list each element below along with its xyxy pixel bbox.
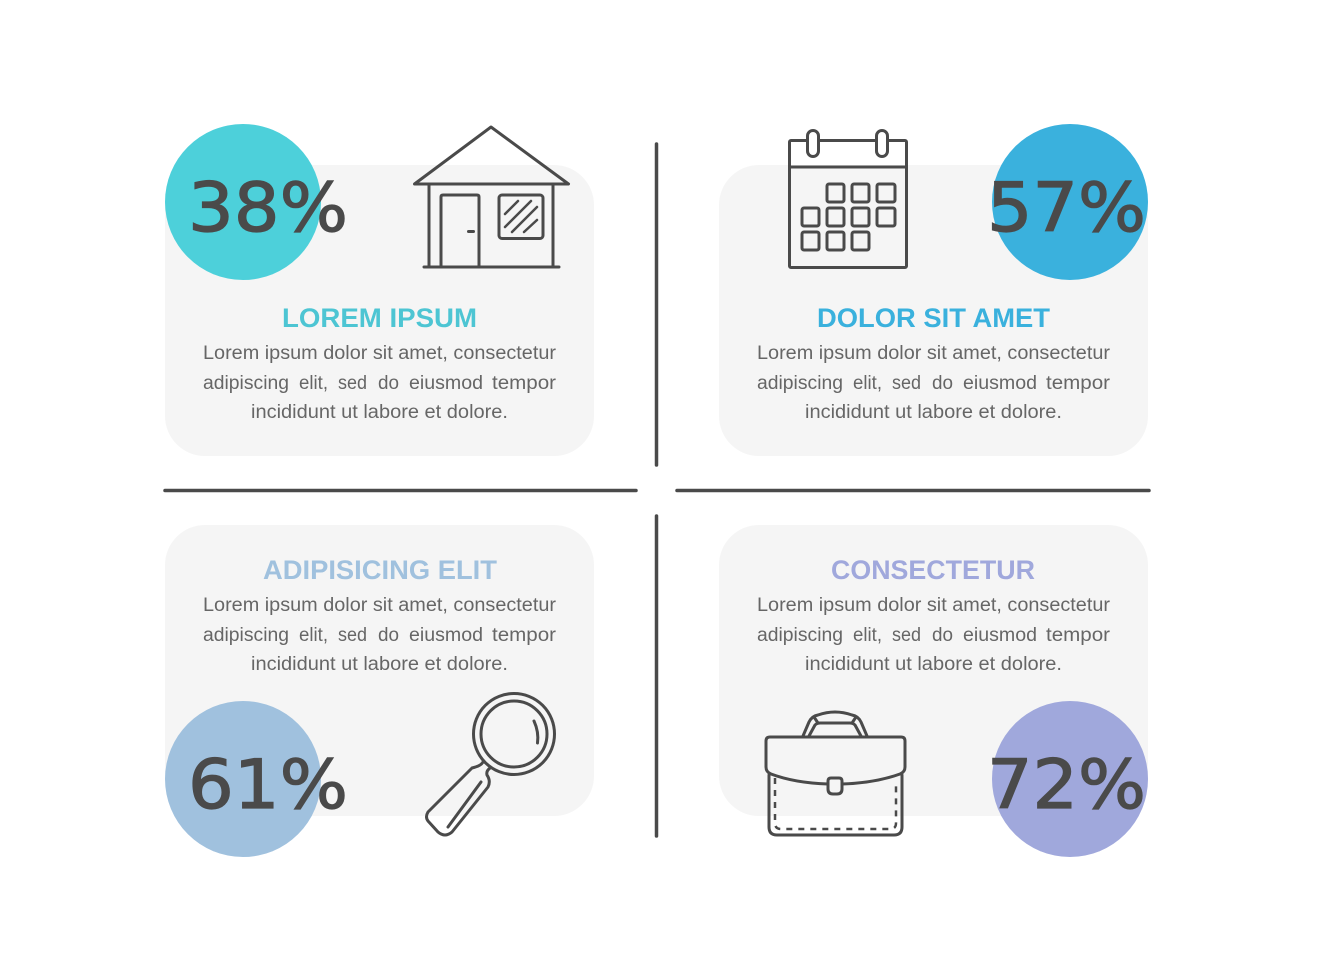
percentage circle: 57%: 57% — [987, 169, 1146, 248]
text block: lorem ipsum: tempor — [492, 373, 557, 394]
text block: consectetur: do — [932, 625, 953, 646]
icon: briefcase — [766, 712, 905, 835]
text block: lorem ipsum: eiusmod — [409, 373, 483, 394]
text block: adipisicing elit: adipiscing — [203, 625, 289, 646]
panel: consectetur — [719, 525, 1148, 857]
panel: adipisicing elit — [165, 525, 594, 857]
text block: lorem ipsum: Lorem ipsum dolor sit amet, consectetur — [203, 343, 557, 364]
text block: dolor sit amet: eiusmod — [963, 373, 1037, 394]
panel: dolor sit amet — [719, 124, 1148, 456]
text block: lorem ipsum: do — [378, 373, 399, 394]
text block: adipisicing elit: tempor — [492, 625, 557, 646]
percentage circle: 72%: 72% — [987, 746, 1146, 825]
percentage circle: 57% — [987, 124, 1148, 280]
heading: dolor sit amet: DOLOR SIT AMET — [817, 303, 1050, 333]
percentage circle: 72% — [987, 701, 1148, 857]
text block: dolor sit amet: tempor — [1046, 373, 1111, 394]
text block: consectetur: Lorem ipsum dolor sit amet, consectetur — [757, 595, 1111, 616]
text block: consectetur: tempor — [1046, 625, 1111, 646]
percentage circle: 38% — [165, 124, 348, 280]
icon: magnifying glass — [426, 694, 554, 835]
text block: lorem ipsum: elit, — [299, 373, 328, 394]
text block: dolor sit amet: adipiscing — [757, 373, 843, 394]
text block: adipisicing elit: elit, — [299, 625, 328, 646]
text block: dolor sit amet: do — [932, 373, 953, 394]
percentage circle: 38%: 38% — [188, 169, 348, 248]
text block: lorem ipsum: incididunt ut labore et dolore. — [251, 402, 508, 423]
heading: lorem ipsum: LOREM IPSUM — [282, 303, 477, 333]
text block: adipisicing elit: do — [378, 625, 399, 646]
panel: lorem ipsum — [165, 124, 594, 456]
icon: house — [414, 127, 568, 267]
text block: lorem ipsum: adipiscing — [203, 373, 289, 394]
heading: adipisicing elit: ADIPISICING ELIT — [263, 555, 497, 585]
text block: dolor sit amet: incididunt ut labore et dolore. — [805, 402, 1062, 423]
text block: dolor sit amet — [757, 343, 1111, 423]
text block: consectetur: adipiscing — [757, 625, 843, 646]
text block: adipisicing elit — [203, 595, 557, 675]
text block: consectetur: incididunt ut labore et dolore. — [805, 654, 1062, 675]
icon: calendar — [790, 130, 906, 268]
text block: consectetur: eiusmod — [963, 625, 1037, 646]
percentage circle: 61% — [165, 701, 348, 857]
text block: consectetur: sed — [892, 625, 921, 646]
text block: lorem ipsum — [203, 343, 557, 423]
text block: dolor sit amet: elit, — [853, 373, 882, 394]
text block: adipisicing elit: sed — [338, 625, 367, 646]
heading: consectetur: CONSECTETUR — [831, 555, 1035, 585]
text block: adipisicing elit: eiusmod — [409, 625, 483, 646]
text block: dolor sit amet: sed — [892, 373, 921, 394]
text block: dolor sit amet: Lorem ipsum dolor sit amet, consectetur — [757, 343, 1111, 364]
text block: adipisicing elit: Lorem ipsum dolor sit amet, consectetur — [203, 595, 557, 616]
text block: adipisicing elit: incididunt ut labore et dolore. — [251, 654, 508, 675]
text block: consectetur — [757, 595, 1111, 675]
text block: lorem ipsum: sed — [338, 373, 367, 394]
percentage circle: 61%: 61% — [188, 746, 348, 825]
text block: consectetur: elit, — [853, 625, 882, 646]
